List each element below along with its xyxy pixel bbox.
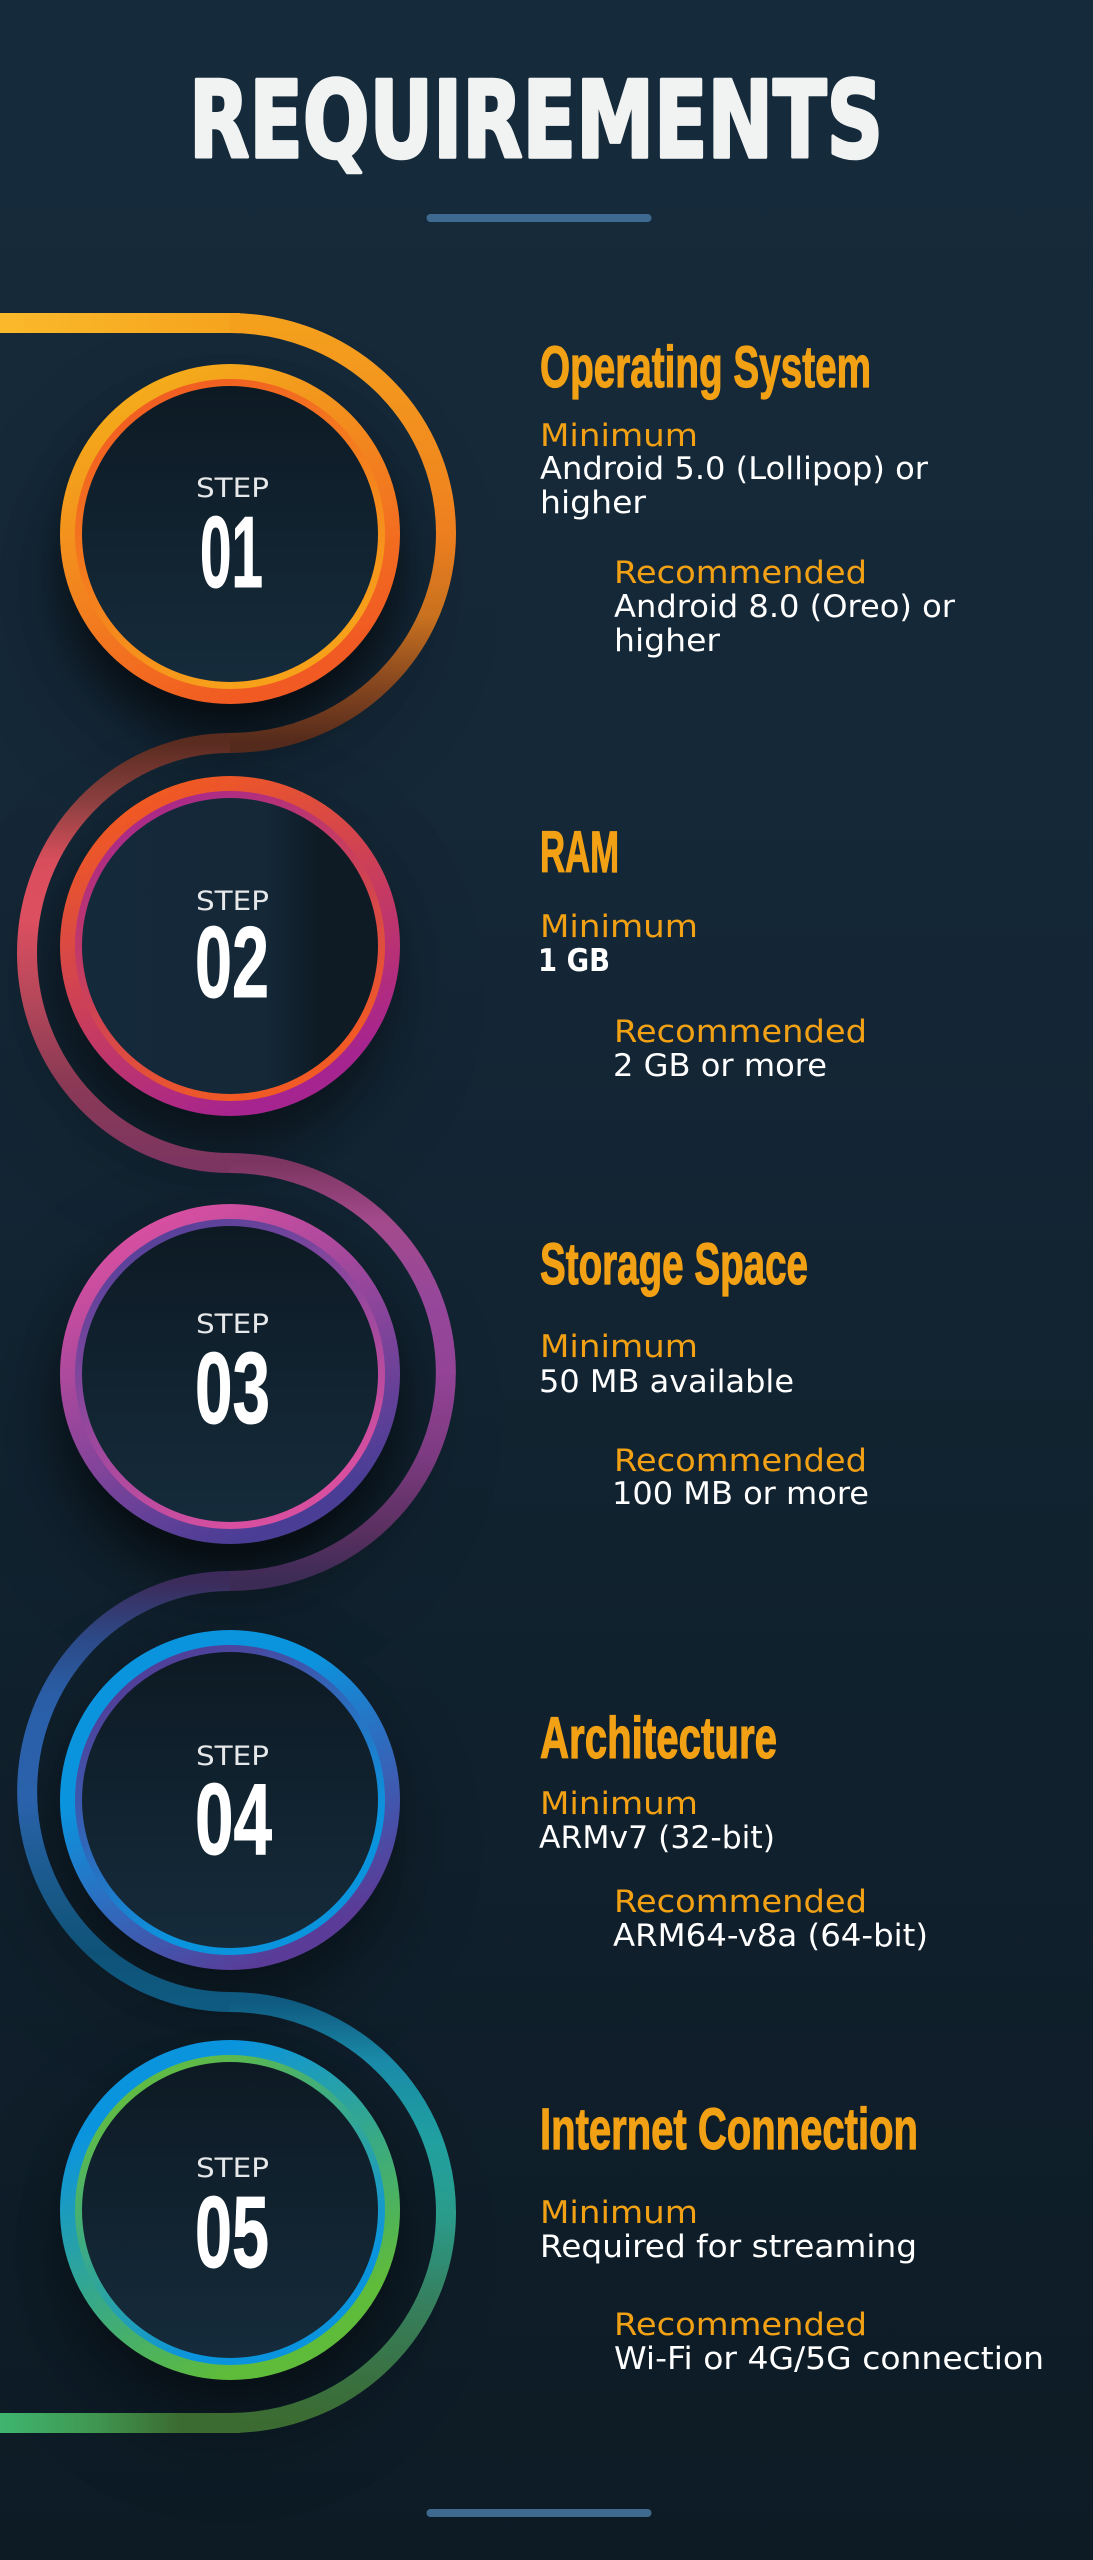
footer divider bar [426, 2509, 652, 2517]
recommended value: ARM64-v8a (64-bit) [613, 1918, 928, 1954]
recommended value: 2 GB or more [613, 1048, 827, 1084]
panel: ram [538, 820, 867, 1084]
badge drop shadows [30, 400, 415, 2441]
title divider bar [426, 214, 652, 222]
minimum label: Minimum [540, 1329, 698, 1365]
step 4 badge [60, 1630, 400, 1970]
recommended label: Recommended [614, 1884, 867, 1920]
step number: 01 [200, 497, 263, 609]
recommended value: 100 MB or more [612, 1476, 869, 1512]
heading: Internet Connection [540, 2097, 918, 2162]
minimum value second line: higher [540, 485, 646, 521]
recommended value: Wi-Fi or 4G/5G connection [614, 2341, 1044, 2377]
step label: STEP [196, 1741, 269, 1772]
step number: 02 [195, 907, 269, 1019]
panel: operating system [540, 335, 955, 659]
heading: Architecture [540, 1706, 777, 1771]
step label: STEP [196, 2153, 269, 2184]
minimum value: 1 GB [538, 943, 610, 979]
recommended value second line: higher [614, 623, 720, 659]
step number: 03 [195, 1333, 270, 1445]
step 3 badge [60, 1204, 400, 1544]
step 2 badge [60, 776, 400, 1116]
panel: architecture [539, 1706, 928, 1954]
recommended label: Recommended [614, 555, 867, 591]
minimum value: ARMv7 (32-bit) [539, 1820, 775, 1856]
step label: STEP [196, 886, 269, 917]
step 5 badge [60, 2040, 400, 2380]
connecting ribbon path [0, 323, 446, 2423]
recommended label: Recommended [614, 1014, 867, 1050]
minimum label: Minimum [540, 418, 698, 454]
heading: Storage Space [540, 1232, 808, 1297]
panel: storage space [539, 1232, 869, 1512]
minimum value: Android 5.0 (Lollipop) or [540, 451, 928, 487]
step number: 04 [195, 1764, 272, 1876]
minimum label: Minimum [540, 1786, 698, 1822]
step number: 05 [195, 2177, 269, 2289]
recommended label: Recommended [614, 1443, 867, 1479]
heading: Operating System [540, 335, 871, 400]
step label: STEP [196, 1309, 269, 1340]
step label: STEP [196, 473, 269, 504]
minimum value: Required for streaming [540, 2229, 917, 2265]
minimum value: 50 MB available [539, 1364, 794, 1400]
heading: RAM [540, 820, 619, 885]
step 1 badge [60, 364, 400, 704]
minimum label: Minimum [540, 909, 698, 945]
recommended value: Android 8.0 (Oreo) or [614, 589, 955, 625]
panel: internet connection [540, 2097, 1044, 2377]
minimum label: Minimum [540, 2195, 698, 2231]
recommended label: Recommended [614, 2307, 867, 2343]
